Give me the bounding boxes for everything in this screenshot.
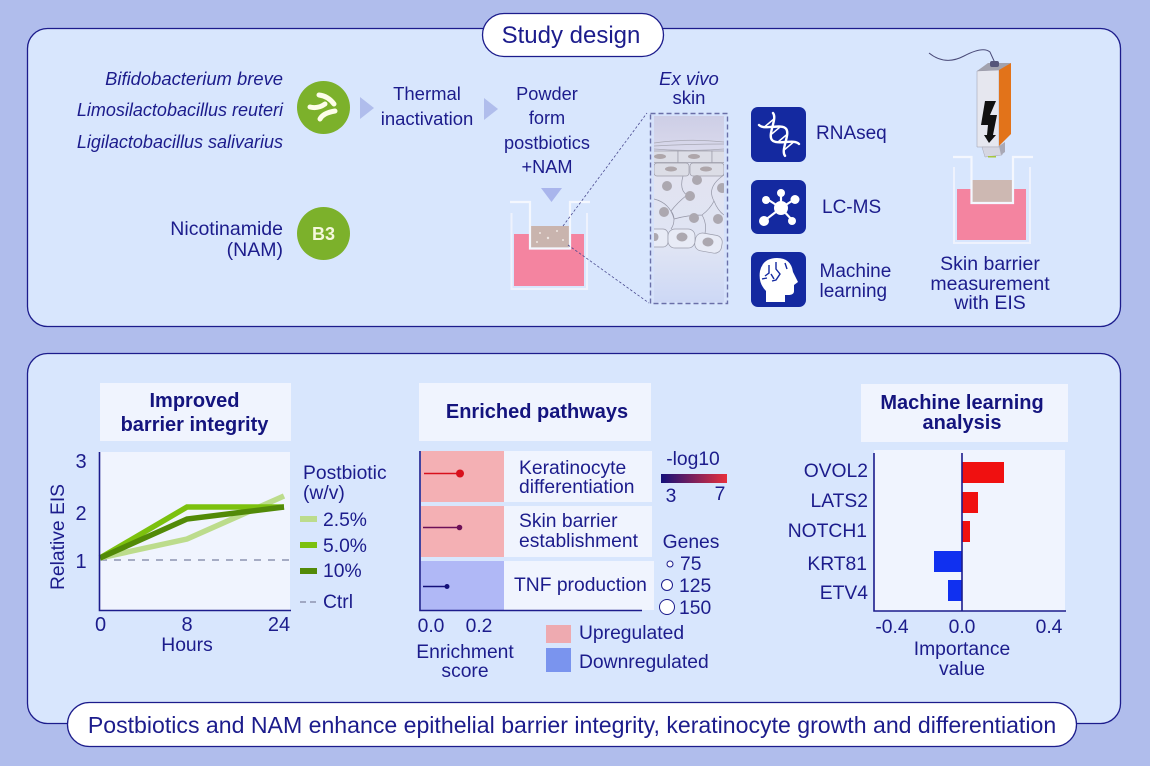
lollipop chart: pathways: Enrichment — [416, 642, 514, 663]
legend: postbiotic: (w/v) — [303, 483, 345, 504]
bar chart: importance: ETV4 — [820, 583, 868, 604]
legend: regulation — [546, 623, 709, 673]
legend: -log10 colour bar: -log10 — [666, 449, 720, 470]
arrow: down to well — [541, 188, 562, 202]
heading: machine learning analysis: Machine learning — [880, 392, 1044, 414]
label: machine learning — [820, 261, 891, 302]
icon: LC-MS — [751, 180, 806, 234]
legend: genes — [660, 532, 719, 619]
heading: study design — [482, 14, 664, 56]
line chart: relative EIS: 24 — [268, 614, 290, 636]
heading: improved barrier integrity: barrier integrity — [121, 414, 269, 436]
text: skin barrier measurement — [930, 253, 1050, 314]
text: skin barrier measurement: with EIS — [953, 292, 1026, 314]
bar chart: importance: value — [939, 659, 985, 680]
legend: regulation: Downregulated — [579, 652, 709, 673]
text: nicotinamide — [170, 218, 283, 261]
text: powder postbiotics: postbiotics — [504, 133, 590, 153]
lollipop chart: pathways — [416, 451, 654, 682]
line chart: relative EIS: 3 — [75, 451, 87, 473]
bar chart: importance: 0.4 — [1036, 617, 1063, 638]
legend: postbiotic: 10% — [323, 561, 362, 582]
legend: postbiotic: 5.0% — [323, 536, 367, 557]
lollipop chart: pathways: differentiation — [519, 477, 634, 498]
icon: bacteria — [297, 81, 350, 134]
heading: improved barrier integrity: Improved — [149, 390, 240, 412]
bar chart: importance — [788, 450, 1066, 680]
legend: -log10 colour bar: 3 — [666, 486, 676, 507]
panel: results — [28, 354, 1120, 724]
label: machine learning: Machine — [820, 261, 891, 282]
bar chart: importance: LATS2 — [810, 491, 868, 512]
lollipop chart: pathways: establishment — [519, 531, 639, 552]
legend: -log10 colour bar: 7 — [715, 484, 725, 505]
heading: machine learning analysis — [861, 384, 1068, 442]
legend: genes: 150 — [679, 598, 711, 619]
text: thermal inactivation — [381, 83, 473, 129]
arrow: to powder — [484, 98, 498, 120]
arrow: to inactivation — [360, 97, 374, 119]
conclusion banner — [68, 702, 1076, 746]
bar chart: importance: Importance — [914, 639, 1010, 660]
panel: study design — [28, 28, 1120, 326]
line chart: relative EIS — [48, 451, 293, 656]
line chart: relative EIS: Hours — [161, 635, 213, 656]
legend: postbiotic: Postbiotic — [303, 463, 387, 484]
bar chart: importance: 0.0 — [949, 617, 975, 638]
text: bacteria names — [77, 68, 284, 152]
text: powder postbiotics — [504, 84, 590, 177]
lollipop chart: pathways: Keratinocyte — [519, 458, 626, 479]
line chart: relative EIS: Relative EIS — [48, 484, 69, 590]
legend: -log10 colour bar — [661, 449, 727, 507]
text: powder postbiotics: Powder — [516, 84, 578, 104]
icon: culture well — [510, 202, 590, 289]
label: machine learning: learning — [820, 281, 887, 302]
heading: enriched pathways — [419, 383, 651, 441]
lollipop chart: pathways: 0.2 — [466, 616, 492, 637]
text: nicotinamide: Nicotinamide — [170, 218, 283, 240]
text: thermal inactivation: Thermal — [393, 83, 461, 104]
icon: RNAseq — [751, 107, 806, 162]
bar chart: importance: KRT81 — [807, 554, 867, 575]
legend: genes: 75 — [680, 554, 701, 575]
icon: machine learning head — [751, 252, 806, 307]
label: RNAseq: RNAseq — [816, 123, 887, 144]
text: ex vivo skin: skin — [673, 87, 705, 108]
line chart: relative EIS: 8 — [181, 614, 193, 636]
legend: genes: 125 — [679, 576, 711, 597]
line chart: relative EIS: 0 — [95, 614, 106, 636]
bar chart: importance: -0.4 — [875, 617, 909, 638]
text: bacteria names: Limosilactobacillus reuteri — [77, 100, 284, 120]
heading: machine learning analysis: analysis — [923, 412, 1001, 434]
bar chart: importance: NOTCH1 — [788, 521, 867, 542]
label: LC-MS: LC-MS — [822, 197, 881, 218]
text: bacteria names: Bifidobacterium breve — [105, 68, 283, 89]
icon: B3: B3 — [312, 224, 335, 244]
lollipop chart: pathways: Skin barrier — [519, 511, 618, 532]
icon: B3 — [297, 207, 350, 260]
legend: postbiotic — [300, 463, 387, 613]
text: thermal inactivation: inactivation — [381, 108, 473, 129]
lollipop chart: pathways: 0.0 — [418, 616, 444, 637]
legend: postbiotic: 2.5% — [323, 510, 367, 531]
text: bacteria names: Ligilactobacillus salivarius — [77, 132, 283, 152]
legend: genes: Genes — [663, 532, 719, 553]
lollipop chart: pathways: score — [441, 661, 489, 682]
text: powder postbiotics: form — [529, 108, 565, 128]
heading: improved barrier integrity — [100, 383, 291, 441]
line chart: relative EIS: 1 — [75, 551, 87, 573]
illustration: EIS well — [953, 157, 1033, 243]
illustration: electrode probe — [929, 50, 1011, 158]
text: nicotinamide: (NAM) — [227, 239, 283, 261]
heading: enriched pathways: Enriched pathways — [446, 401, 628, 423]
illustration: ex vivo skin section — [650, 112, 728, 304]
text: ex vivo skin: Ex vivo — [659, 68, 719, 89]
lollipop chart: pathways: TNF production — [514, 575, 647, 596]
bar chart: importance: OVOL2 — [804, 461, 868, 482]
legend: postbiotic: Ctrl — [323, 592, 353, 613]
text: skin barrier measurement: Skin barrier — [940, 253, 1040, 275]
text: ex vivo skin — [659, 68, 719, 108]
heading: study design: Study design — [502, 22, 640, 49]
zoom lines — [563, 113, 649, 303]
text: skin barrier measurement: measurement — [930, 273, 1050, 295]
conclusion banner: Postbiotics and NAM enhance epithelial barrier integrity, keratinocyte growth and differentiation — [88, 712, 1056, 738]
line chart: relative EIS: 2 — [75, 503, 87, 525]
legend: regulation: Upregulated — [579, 623, 684, 644]
text: powder postbiotics: +NAM — [521, 157, 573, 177]
